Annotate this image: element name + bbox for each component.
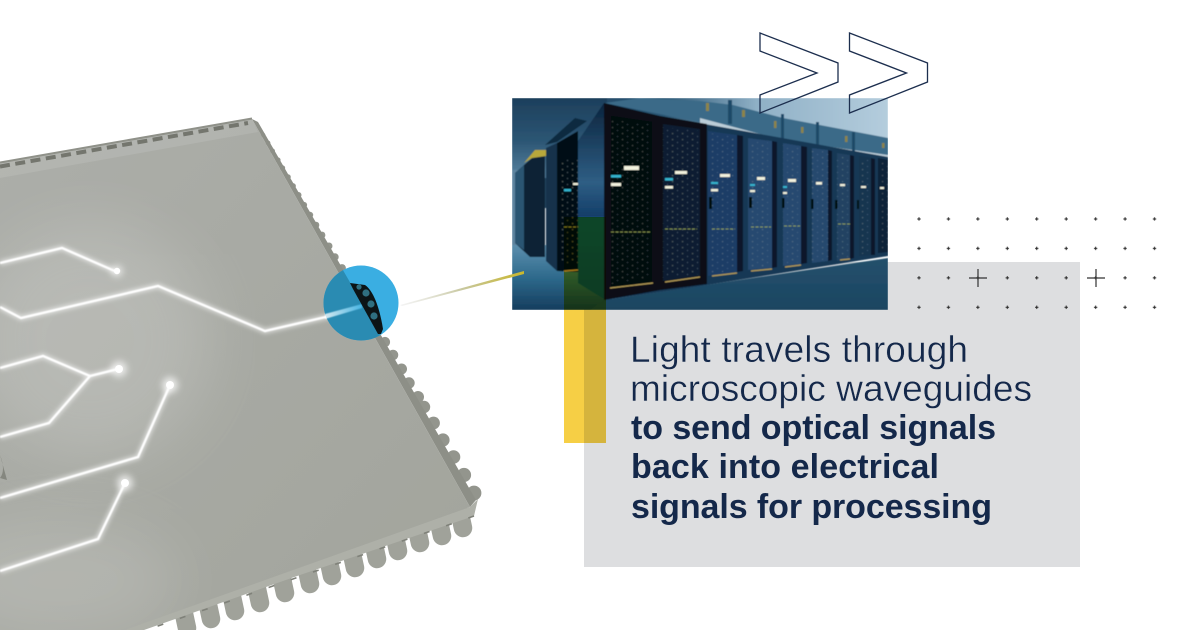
rack dark gaps — [737, 135, 875, 272]
photodetector pins — [350, 283, 383, 334]
server room photo — [512, 98, 888, 310]
magnifier circle — [324, 266, 398, 340]
rack floor lights — [564, 259, 850, 288]
green LED rows — [564, 224, 850, 232]
far rack row — [515, 156, 545, 257]
middle rack panel — [546, 143, 557, 271]
floor left — [512, 245, 612, 310]
chip surface — [0, 119, 470, 630]
rack side panel — [578, 103, 604, 299]
ceiling — [512, 98, 888, 208]
circle over chip — [324, 270, 380, 340]
headline text: to send optical signals — [631, 409, 996, 447]
pin shoulders — [112, 516, 474, 630]
dot grid — [904, 204, 1169, 322]
overhead fixture tray — [605, 98, 888, 157]
waveguide end points — [111, 265, 178, 491]
headline text: signals for processing — [631, 488, 992, 526]
grey text panel — [584, 262, 1080, 567]
light streak — [325, 304, 362, 319]
crescent notch — [0, 455, 7, 480]
chip side wall — [100, 499, 478, 630]
middle rack front — [557, 131, 578, 272]
surface glow — [0, 119, 258, 630]
plus marks — [969, 269, 1105, 287]
rack doors — [611, 116, 888, 288]
headline text: back into electrical — [631, 448, 939, 486]
chip with waveguides — [0, 118, 481, 630]
yellow bar — [564, 217, 606, 443]
rack 1 and 2 body — [604, 103, 707, 300]
left wall — [512, 170, 518, 246]
door handles — [709, 197, 859, 209]
headline text: microscopic waveguides — [630, 368, 1032, 409]
fixture hangers — [728, 100, 855, 152]
rack row frame — [604, 103, 888, 300]
rack LED texture — [611, 120, 888, 284]
double chevron — [760, 33, 928, 113]
bottom edge pins — [184, 514, 463, 628]
headline text — [630, 329, 1032, 526]
status lights — [573, 166, 884, 194]
floor right — [590, 258, 888, 310]
ceiling left — [512, 98, 607, 178]
fixture tags — [706, 103, 884, 148]
waveguide lines — [0, 248, 330, 571]
chip right bevel — [252, 119, 476, 507]
top edge pins — [0, 118, 252, 166]
headline text: Light travels through — [630, 329, 968, 370]
waveguide glow — [0, 248, 330, 571]
right edge pins — [261, 133, 481, 500]
connector beam — [400, 271, 524, 306]
far rack yellow top — [524, 150, 546, 163]
middle rack roof — [545, 118, 587, 145]
